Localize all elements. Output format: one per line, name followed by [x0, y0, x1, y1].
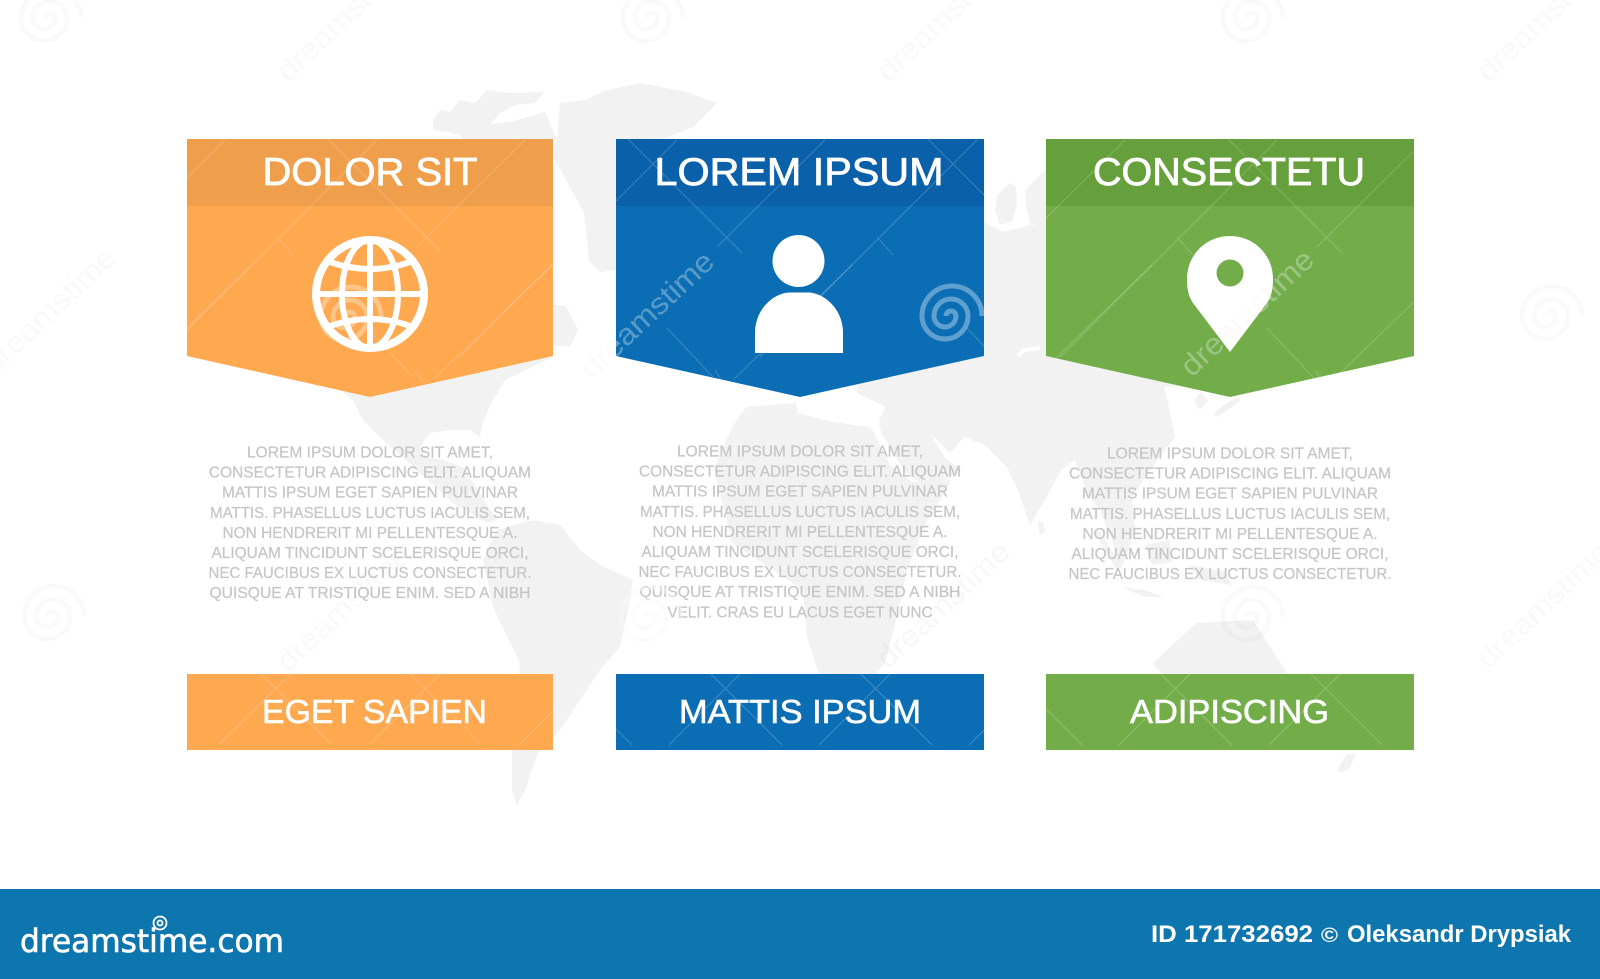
- blue body text: [638, 444, 962, 621]
- icon: globe: [316, 240, 424, 348]
- green body text: CONSECTETUR ADIPISCING ELIT. ALIQUAM: [1069, 466, 1391, 483]
- watermark wordmarks: dreamstime: [1174, 243, 1321, 383]
- green body text: [1068, 446, 1392, 583]
- watermark wordmarks: dreamstime: [574, 245, 721, 385]
- green body text: NEC FAUCIBUS EX LUCTUS CONSECTETUR.: [1068, 566, 1392, 583]
- orange body text: [208, 444, 532, 602]
- blue footer label: MATTIS IPSUM: [679, 693, 921, 730]
- icon: map pin: [1187, 236, 1273, 352]
- green body text: LOREM IPSUM DOLOR SIT AMET,: [1107, 446, 1353, 462]
- orange body text: CONSECTETUR ADIPISCING ELIT. ALIQUAM: [209, 465, 531, 482]
- blue panel body: [616, 139, 984, 397]
- orange footer label: EGET SAPIEN: [262, 693, 487, 730]
- orange body text: MATTIS IPSUM EGET SAPIEN PULVINAR: [222, 485, 518, 502]
- watermark lines on footer labels: [218, 674, 1382, 746]
- blue footer label: [616, 674, 984, 750]
- orange body text: NON HENDRERIT MI PELLENTESQUE A.: [222, 525, 518, 542]
- blue body text: MATTIS IPSUM EGET SAPIEN PULVINAR: [652, 484, 948, 501]
- blue body text: ALIQUAM TINCIDUNT SCELERISQUE ORCI,: [642, 544, 958, 561]
- background world map: [340, 83, 1356, 805]
- watermark wordmarks: dreamstime: [1174, 243, 1321, 383]
- blue body text: CONSECTETUR ADIPISCING ELIT. ALIQUAM: [639, 464, 961, 481]
- blue body text: QUISQUE AT TRISTIQUE ENIM. SED A NIBH: [640, 584, 960, 601]
- footer logo wordmark: dreamstime.com: [20, 922, 284, 960]
- blue body text: VELIT. CRAS EU LACUS EGET NUNC: [668, 604, 932, 621]
- green panel: [1046, 139, 1414, 397]
- blue panel header band: [616, 139, 984, 206]
- orange body text: NEC FAUCIBUS EX LUCTUS CONSECTETUR.: [208, 565, 532, 582]
- white map inlet: caspian sea: [1018, 348, 1040, 356]
- green body text: NON HENDRERIT MI PELLENTESQUE A.: [1082, 526, 1378, 543]
- footer credit: ©: [1321, 925, 1338, 947]
- green footer label: ADIPISCING: [1130, 693, 1329, 730]
- orange body text: QUISQUE AT TRISTIQUE ENIM. SED A NIBH: [210, 585, 530, 602]
- watermark wordmarks: dreamstime: [870, 535, 1017, 675]
- blue body text: NON HENDRERIT MI PELLENTESQUE A.: [652, 524, 948, 541]
- orange panel: [187, 139, 553, 397]
- green panel header band: [1046, 139, 1414, 206]
- blue body text: MATTIS. PHASELLUS LUCTUS IACULIS SEM,: [640, 504, 960, 521]
- footer credit: ID 171732692: [1151, 921, 1313, 948]
- watermark wordmarks: [0, 0, 1600, 678]
- orange panel header band: [187, 139, 553, 206]
- orange panel title: DOLOR SIT: [262, 151, 478, 194]
- green panel body: [1046, 139, 1414, 397]
- icon: person: [755, 235, 843, 353]
- blue body text: LOREM IPSUM DOLOR SIT AMET,: [677, 444, 923, 460]
- footer bar: [0, 889, 1600, 979]
- blue body text: NEC FAUCIBUS EX LUCTUS CONSECTETUR.: [638, 564, 962, 581]
- watermark wordmarks: dreamstime: [270, 538, 417, 678]
- blue panel: [616, 139, 984, 397]
- watermark lines on panels: [187, 139, 1414, 384]
- watermark spirals: [21, 0, 1582, 640]
- orange body text: MATTIS. PHASELLUS LUCTUS IACULIS SEM,: [210, 505, 530, 522]
- green panel title: CONSECTETU: [1093, 151, 1365, 194]
- green body text: MATTIS IPSUM EGET SAPIEN PULVINAR: [1082, 486, 1378, 503]
- orange body text: ALIQUAM TINCIDUNT SCELERISQUE ORCI,: [212, 545, 528, 562]
- footer credit: [1151, 921, 1572, 948]
- footer logo spiral: [154, 916, 166, 930]
- orange body text: LOREM IPSUM DOLOR SIT AMET,: [247, 444, 493, 462]
- orange panel body: [187, 139, 553, 397]
- watermark wordmarks: dreamstime: [574, 245, 721, 385]
- green body text: ALIQUAM TINCIDUNT SCELERISQUE ORCI,: [1072, 546, 1388, 563]
- green footer label: [1046, 674, 1414, 750]
- green body text: MATTIS. PHASELLUS LUCTUS IACULIS SEM,: [1070, 506, 1390, 523]
- orange footer label: [187, 674, 553, 750]
- blue panel title: LOREM IPSUM: [654, 151, 944, 194]
- footer credit: Oleksandr Drypsiak: [1347, 921, 1572, 948]
